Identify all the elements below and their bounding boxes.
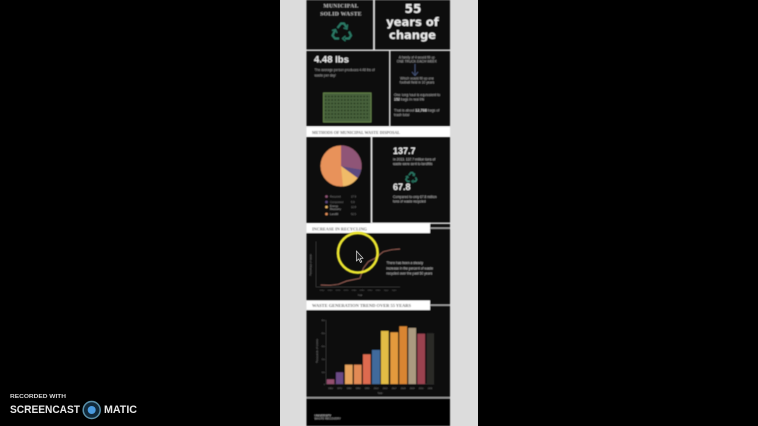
panel: recycling line chart (306, 224, 450, 300)
line chart: 1980 (352, 290, 357, 292)
text: recycled description: Compared to only 67.8 million (393, 195, 437, 199)
panel: waste generation bar chart (306, 300, 450, 397)
icon: screencast logo (83, 402, 100, 418)
line chart: 1990 (368, 290, 373, 292)
bar chart: 1980 (347, 388, 352, 390)
text: football field: Which would fill up one (400, 76, 434, 80)
text: bags: 152 bags in real life (394, 98, 424, 102)
text: family of four (397, 56, 438, 64)
stat: 67.8: 67.8 (393, 182, 411, 192)
line chart: Percentage of waste (310, 253, 312, 276)
legend: Recovery (330, 207, 342, 211)
panel: municipal solid waste title (306, 0, 373, 50)
bar chart: 250 (321, 333, 326, 335)
text: recycled description: tons of waste recycled (393, 200, 426, 204)
panel: 4.48 lbs per day (306, 51, 389, 126)
watermark: recorded with screencast-o-matic: RECORDED WITH (10, 394, 66, 400)
watermark: recorded with screencast-o-matic (10, 394, 137, 418)
legend: 52.5 (351, 212, 357, 216)
text: family of four: A family of 4 would fill up (399, 56, 435, 60)
icon: mouse cursor (356, 251, 363, 262)
gray page column (280, 0, 478, 426)
text: total bags (394, 108, 439, 117)
text: average person: The average person produces 4.48 lbs of (314, 68, 375, 72)
text: bags: One long haul is equivalent to (394, 93, 440, 97)
watermark: recorded with screencast-o-matic: MATIC (104, 404, 137, 416)
title: municipal solid waste: MUNICIPAL (323, 3, 359, 9)
line chart (310, 242, 400, 297)
legend (325, 194, 357, 216)
bar chart: Thousands of tonnes (315, 338, 319, 363)
heading bar: waste generation trend (306, 300, 430, 310)
heading bar: methods of municipal waste disposal (306, 127, 450, 136)
legend: Landfill (330, 212, 339, 216)
stat: 137.7: 137.7 (393, 146, 416, 156)
line chart: 1970 (336, 290, 341, 292)
icon: recycle symbol (406, 173, 417, 183)
heading bar: waste generation trend: WASTE GENERATION TREND OVER 55 YEARS (312, 303, 411, 308)
title: municipal solid waste: SOLID WASTE (320, 12, 362, 18)
panel: landfill and recycled stats (372, 137, 450, 222)
heading: 55 years of change: years of (386, 15, 440, 29)
heading bar: increase in recycling (306, 224, 430, 233)
text: landfill description: waste were sent to landfills (393, 162, 433, 166)
heading bar: increase in recycling: INCREASE IN RECYCLING (312, 226, 367, 231)
line chart: 1985 (360, 290, 365, 292)
text: footer credit: UNIVERSITY (314, 414, 331, 418)
text: landfill description: In 2013, 137.7 million tons of (393, 158, 435, 162)
line chart: 1995 (376, 290, 381, 292)
text: total bags: That is about 12,768 bags of (394, 108, 439, 112)
heading: 55 years of change: 55 (405, 2, 421, 16)
connector line (430, 304, 450, 306)
stat: 4.48 lbs: 4.48 lbs (314, 54, 349, 65)
line chart: 1960 (320, 290, 325, 292)
icon: recycle symbol (332, 24, 351, 41)
text: recycling note: There has been a steady (386, 261, 423, 265)
bar chart: 1960 (328, 388, 334, 390)
bar chart (315, 320, 434, 395)
bar chart: 2007 (392, 388, 397, 390)
title: municipal solid waste (320, 3, 362, 18)
line chart: 2005 (392, 290, 397, 292)
line chart: 1975 (344, 290, 349, 292)
bar chart: Year (377, 391, 383, 395)
text: footer credit: WASTE RECOVERY (314, 416, 341, 420)
cursor highlight ring (338, 233, 378, 273)
bar chart: 2000 (374, 388, 379, 390)
text: average person: waste per day! (314, 74, 336, 78)
text: family of four: ONE TRUCK EACH WEEK (397, 60, 438, 64)
bar chart: 100 (321, 372, 326, 374)
panel: pie chart (306, 137, 370, 223)
bar chart: 1990 (356, 388, 361, 390)
bar chart: 2010 (419, 388, 424, 390)
panel: footer (306, 398, 450, 426)
heading: 55 years of change: change (389, 28, 436, 42)
line chart: Year (358, 294, 363, 297)
bar chart: 0 (324, 384, 326, 386)
legend: 12.8 (351, 205, 357, 209)
legend: Composted (330, 200, 344, 204)
connector line (430, 228, 450, 229)
heading bar: methods of municipal waste disposal: METHODS OF MUNICIPAL WASTE DISPOSAL (312, 130, 400, 135)
bar chart: 2009 (410, 388, 415, 390)
arrow: down (412, 64, 418, 76)
text: landfill description (393, 158, 435, 166)
pie chart (320, 146, 362, 186)
panel: family of 4 facts (390, 51, 450, 126)
legend: Energy (330, 204, 339, 208)
divider (306, 397, 450, 398)
icon: football field grid (324, 93, 371, 122)
text: bags (394, 93, 440, 102)
bar chart: 1995 (365, 388, 370, 390)
bar chart: 150 (321, 359, 326, 361)
heading: 55 years of change (386, 2, 440, 42)
text: football field: football field in 10 years (400, 80, 435, 84)
bar chart: 2005 (383, 388, 388, 390)
line chart: 1965 (328, 290, 333, 292)
bar chart: 200 (321, 346, 326, 348)
line chart: 2000 (384, 290, 389, 292)
watermark: recorded with screencast-o-matic: SCREENCAST (10, 404, 80, 416)
legend: 17.9 (351, 194, 357, 198)
bar chart: 1970 (337, 388, 343, 390)
text: football field (400, 76, 435, 84)
bar chart: 2011 (428, 388, 433, 390)
text: footer credit (314, 414, 341, 420)
bar chart: 300 (321, 320, 326, 322)
panel: 55 years of change (375, 0, 450, 50)
legend: Recycled (330, 194, 341, 198)
text: total bags: trash total (394, 113, 410, 117)
bar chart: 2008 (401, 388, 406, 390)
legend: 5.9 (351, 200, 355, 204)
text: recycling note: recycled over the past 50 years (386, 272, 433, 276)
text: average person (314, 68, 375, 78)
text: recycled description (393, 195, 437, 204)
text: recycling note (386, 261, 433, 276)
text: recycling note: increase in the percent of waste (386, 266, 433, 270)
